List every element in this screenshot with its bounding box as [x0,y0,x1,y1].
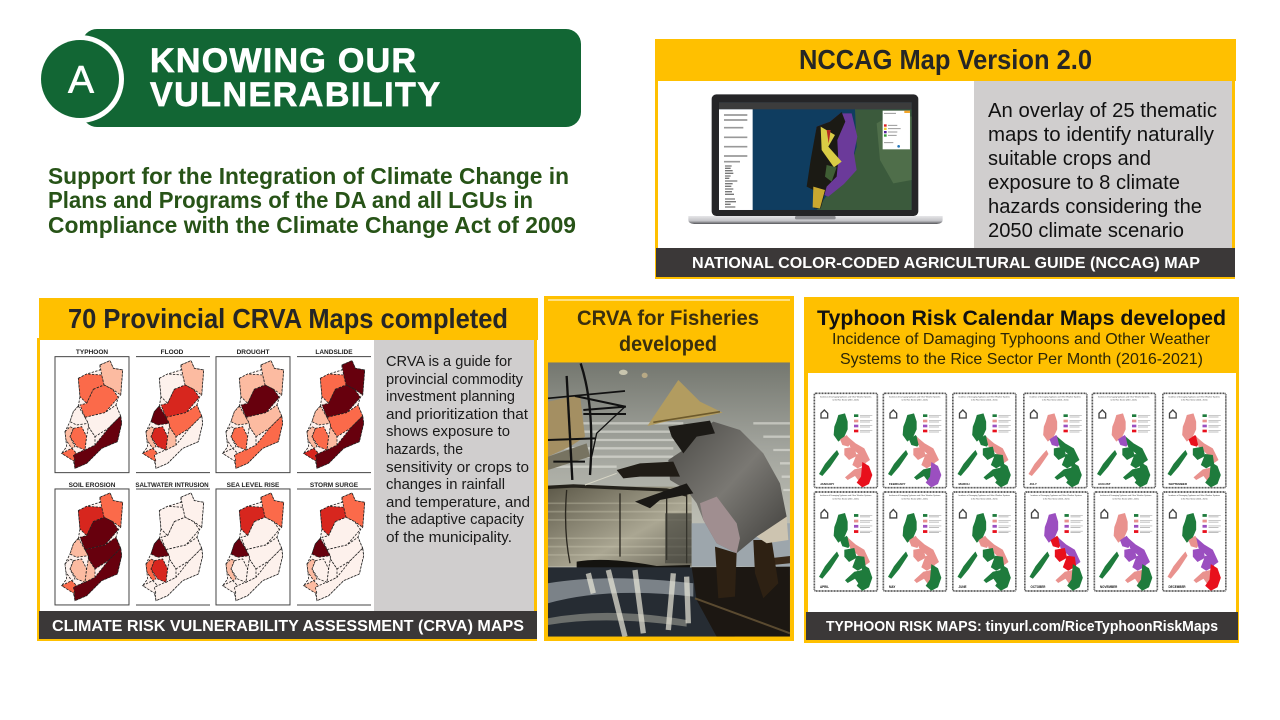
map card: February: FEBRUARY [889,482,905,486]
typhoon heading: Typhoon Risk Calendar Maps developed [817,306,1226,330]
hazard map: drought [216,349,290,473]
CRVA description [386,353,530,546]
NCCAG caption bar: NATIONAL COLOR-CODED AGRICULTURAL GUIDE (NCCAG) MAP [692,255,1200,272]
NCCAG heading: NCCAG Map Version 2.0 [799,44,1092,75]
CRVA description: hazards, the [386,441,463,458]
hazard map: landslide [297,349,371,473]
map card: May: MAY [889,585,895,589]
hazard map: storm surge: STORM SURGE [310,482,359,489]
map card: June: JUNE [958,585,966,589]
CRVA description: shows exposure to [386,423,510,440]
subtitle text: Plans and Programs of the DA and all LGUs in [48,187,533,213]
CRVA description: and prioritization that [386,406,529,423]
typhoon subheading: Incidence of Damaging Typhoons and Other Weather [832,331,1211,348]
hazard map: drought: DROUGHT [237,349,269,356]
hazard map: typhoon: TYPHOON [76,349,108,356]
hazard map: flood: FLOOD [161,349,184,356]
CRVA description: changes in rainfall [386,476,505,493]
hazard map: sea level rise: SEA LEVEL RISE [227,482,280,489]
CRVA description: of the municipality. [386,529,512,546]
map card: January: JANUARY [820,482,834,486]
map card: August: AUGUST [1098,482,1111,486]
typhoon subheading [832,331,1211,368]
map card: January [814,393,877,488]
panel: CRVA for fisheries [544,296,794,641]
panel: typhoon risk calendar maps [804,297,1239,643]
CRVA heading: 70 Provincial CRVA Maps completed [68,303,508,334]
hazard map: flood [136,349,210,473]
subtitle text [48,163,576,238]
panel: provincial CRVA maps [37,298,538,641]
map card: November [1094,492,1157,591]
map card: August [1092,393,1155,488]
fisheries heading: CRVA for Fisheries [577,306,759,330]
hazard map: typhoon [55,349,129,473]
CRVA description: and temperature, and [386,494,530,511]
panel: NCCAG map [655,39,1236,279]
CRVA description: sensitivity or crops to [386,459,529,476]
typhoon caption bar [806,612,1238,640]
subtitle text: Compliance with the Climate Change Act of 2009 [48,212,576,238]
map card: November: NOVEMBER [1100,585,1118,589]
map card: March [953,393,1016,488]
hazard map: saltwater intrusion [135,482,210,605]
hazard map: soil erosion [55,482,129,605]
CRVA caption bar: CLIMATE RISK VULNERABILITY ASSESSMENT (CRVA) MAPS [52,618,524,635]
badge letter A [41,40,119,118]
fisheries heading: developed [619,332,717,356]
photo: fisherman with net [548,362,790,637]
CRVA description: the adaptive capacity [386,511,524,528]
map card: July: JULY [1029,482,1037,486]
banner title: VULNERABILITY [150,76,440,114]
CRVA caption bar [39,611,537,639]
NCCAG description: suitable crops and [988,148,1151,170]
map card: June [953,492,1016,591]
section header banner [36,29,581,127]
map card: December [1163,492,1226,591]
map card: April [814,492,877,591]
map card: July [1024,393,1087,488]
map card: September: SEPTEMBER [1168,482,1188,486]
laptop with NCCAG map [688,94,943,224]
map card: October [1025,492,1088,591]
map card: March: MARCH [958,482,970,486]
typhoon subheading: Systems to the Rice Sector Per Month (2016-2021) [840,351,1203,368]
hazard map: soil erosion: SOIL EROSION [69,482,116,489]
CRVA description: investment planning [386,388,515,405]
map card: February [883,393,946,488]
NCCAG caption bar [656,248,1235,277]
map card: October: OCTOBER [1030,585,1046,589]
hazard map: saltwater intrusion: SALTWATER INTRUSION [135,482,209,489]
NCCAG description: 2050 climate scenario [988,220,1184,242]
NCCAG description: An overlay of 25 thematic [988,100,1217,122]
CRVA description: CRVA is a guide for [386,353,512,370]
NCCAG description [988,100,1217,242]
banner title: KNOWING OUR [150,42,416,80]
map card: May [883,492,946,591]
hazard map: sea level rise [216,482,290,605]
map card: April: APRIL [820,585,829,589]
CRVA description: provincial commodity [386,371,523,388]
subtitle text: Support for the Integration of Climate Change in [48,163,569,189]
NCCAG description: exposure to 8 climate [988,172,1180,194]
map card: December: DECEMBER [1168,585,1186,589]
hazard map: storm surge [297,482,371,605]
map card: September [1163,393,1226,488]
badge letter A: A [68,59,94,102]
hazard map: landslide: LANDSLIDE [315,349,353,356]
typhoon caption bar: TYPHOON RISK MAPS: tinyurl.com/RiceTyphoonRiskMaps [826,618,1218,635]
fisheries heading [577,306,759,356]
NCCAG description: maps to identify naturally [988,124,1214,146]
NCCAG description: hazards considering the [988,196,1202,218]
